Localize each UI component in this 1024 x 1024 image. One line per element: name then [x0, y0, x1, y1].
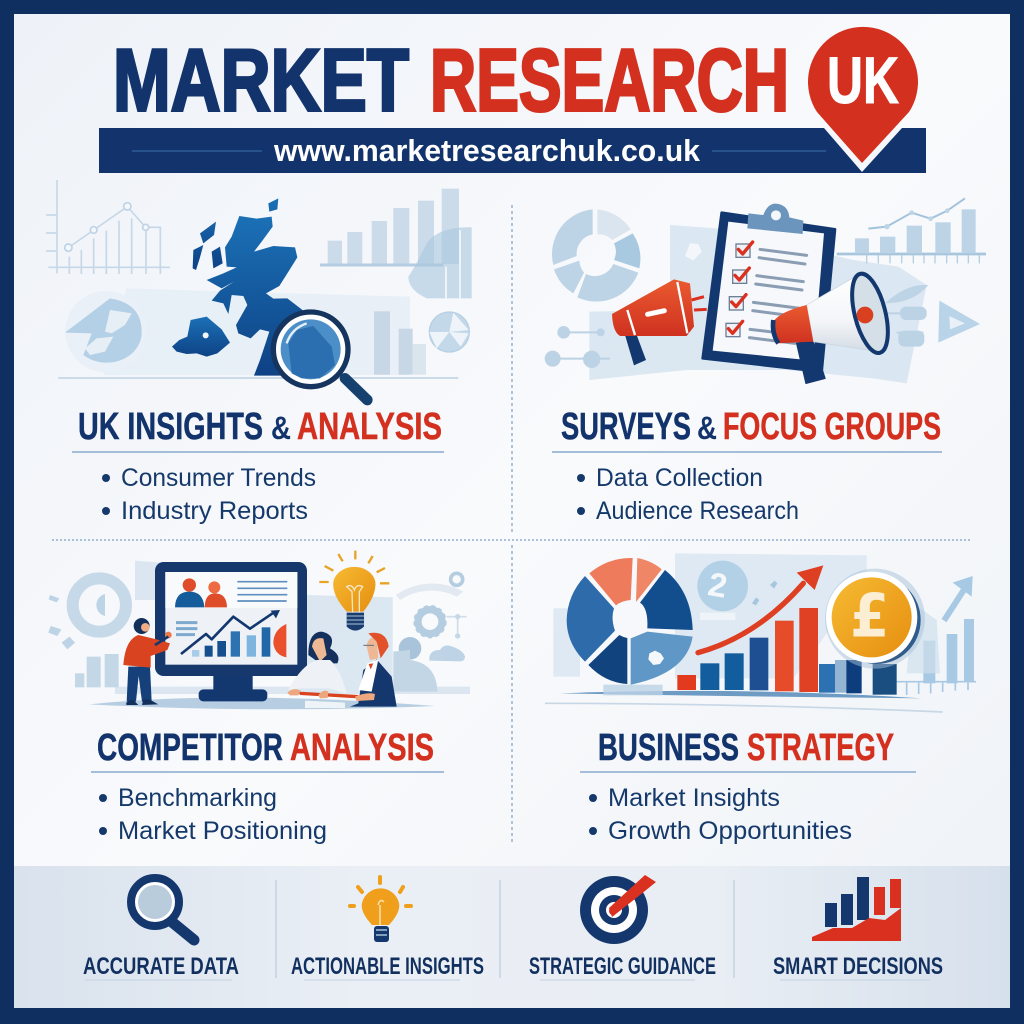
background shapes [545, 198, 986, 383]
label: accurate data: ACCURATE DATA [83, 953, 239, 980]
section dividers [52, 205, 970, 845]
icon: UK location pin [808, 27, 918, 172]
heading: ANALYSIS [290, 727, 434, 769]
bullet list: Consumer Trends [121, 464, 316, 492]
pound coin [825, 569, 925, 669]
illustration: survey clipboard and megaphones [545, 198, 986, 383]
bullet list: Audience Research [596, 497, 799, 525]
bullet list [99, 784, 327, 845]
seated colleagues [287, 632, 397, 708]
illustration: competitor analysis presentation [48, 551, 470, 709]
red megaphone [612, 279, 707, 365]
illustration: business strategy charts [545, 553, 976, 712]
bullet list [102, 464, 316, 525]
heading [580, 727, 916, 773]
pie chart [567, 558, 693, 695]
website banner: www.marketresearchuk.co.uk [273, 133, 701, 168]
label: actionable insights: ACTIONABLE INSIGHTS [291, 953, 484, 980]
bar chart [677, 608, 897, 695]
bullet list: Benchmarking [118, 784, 277, 812]
bullet list: Growth Opportunities [608, 817, 852, 845]
heading: & [271, 410, 291, 446]
icon: actionable insights bulb [350, 877, 411, 942]
bullet list: Data Collection [596, 464, 763, 492]
bullet list [589, 784, 852, 845]
website banner [99, 128, 926, 173]
panel: bottom benefits band [14, 866, 1010, 1008]
heading: STRATEGY [747, 727, 894, 769]
bullet list: Industry Reports [121, 497, 308, 525]
magnifying glass [273, 312, 367, 400]
panel: Business Strategy [580, 727, 916, 845]
icon: accurate data magnifier [131, 878, 194, 940]
presenter [123, 618, 172, 705]
white megaphone [773, 270, 895, 383]
label: strategic guidance: STRATEGIC GUIDANCE [529, 953, 716, 980]
pound coin: £ [850, 582, 889, 651]
bullet list [577, 464, 799, 525]
icon: UK location pin: UK [827, 43, 899, 117]
bullet list: Market Insights [608, 784, 780, 812]
background charts [46, 180, 472, 378]
bullet list: Market Positioning [118, 817, 327, 845]
panel: Surveys and Focus Groups [552, 406, 942, 525]
background shapes [545, 553, 976, 712]
heading: ANALYSIS [297, 406, 442, 448]
title: MARKET [113, 30, 409, 130]
heading [72, 406, 444, 453]
heading: & [697, 410, 717, 446]
heading: SURVEYS [561, 406, 691, 448]
icon: strategic guidance target [580, 875, 656, 944]
heading [91, 727, 444, 773]
monitor [155, 562, 307, 701]
panel: Competitor Analysis [91, 727, 444, 845]
heading: FOCUS GROUPS [723, 406, 941, 448]
heading: BUSINESS [598, 727, 739, 769]
heading [552, 406, 942, 453]
heading: UK INSIGHTS [78, 406, 263, 448]
heading: COMPETITOR [97, 727, 283, 769]
illustration: UK map with magnifier [46, 180, 472, 400]
light bulb [319, 551, 389, 631]
panel: UK Insights and Analysis [72, 406, 444, 525]
map of the UK and Ireland [172, 198, 317, 376]
clipboard [703, 204, 835, 372]
label: smart decisions: SMART DECISIONS [773, 953, 943, 980]
title: RESEARCH [430, 30, 789, 130]
growth arrow [698, 565, 823, 653]
background shapes: 2 [705, 566, 730, 606]
icon: smart decisions chart [812, 877, 901, 941]
title [113, 30, 789, 130]
background shapes [48, 561, 470, 709]
